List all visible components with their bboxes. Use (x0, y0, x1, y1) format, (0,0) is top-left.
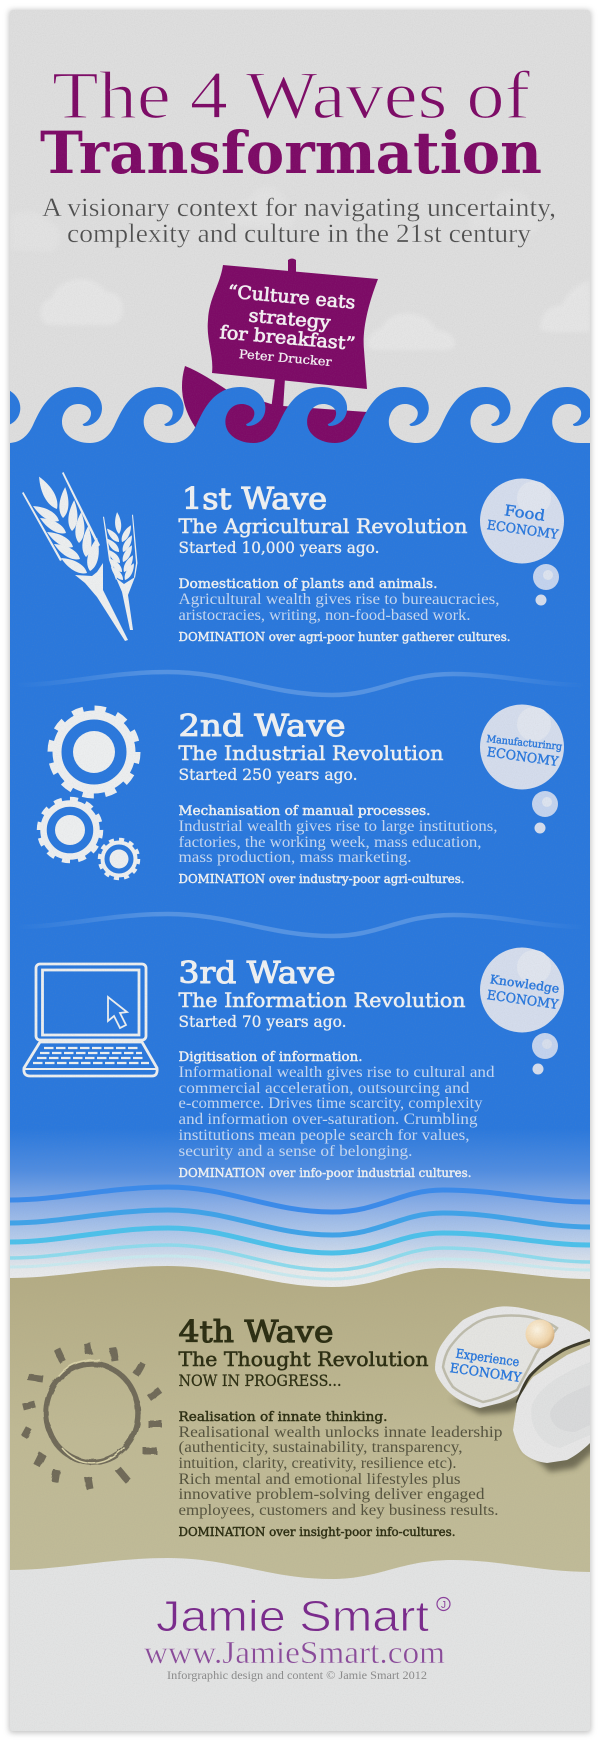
oyster shell: Experience economy: Experience (455, 1346, 520, 1369)
wave 1 text: The Agricultural Revolution (178, 514, 468, 538)
wave 4 text: Realisation of innate thinking. (178, 1410, 388, 1425)
laptop base (24, 1042, 157, 1076)
title: The 4 Waves of (52, 57, 530, 133)
wave 3 text: e-commerce. Drives time scarcity, complexity (178, 1095, 482, 1112)
wave 3 text: DOMINATION over info-poor industrial cultures. (178, 1166, 472, 1180)
subtitle: complexity and culture in the 21st century (67, 219, 531, 248)
wave 3 text: The Information Revolution (178, 988, 466, 1012)
sail quote: strategy (248, 305, 332, 334)
wave 1 thought bubble: Food economy: ECONOMY (486, 518, 560, 543)
wave 1 text: Agricultural wealth gives rise to bureaucracies, (178, 591, 500, 608)
pearl (526, 1320, 554, 1348)
wave 2 text: DOMINATION over industry-poor agri-cultures. (178, 872, 464, 886)
wave 4 text: Rich mental and emotional lifestyles plus (178, 1471, 460, 1488)
wave 1 text: Domestication of plants and animals. (178, 577, 438, 592)
upper shell (435, 1306, 590, 1408)
wave 2 text: The Industrial Revolution (178, 741, 444, 765)
wave 1 text (178, 482, 510, 644)
wave 3 text: Informational wealth gives rise to cultural and (178, 1064, 494, 1081)
footer paper (10, 1558, 590, 1600)
sun circle (46, 1364, 138, 1462)
wave 3 text: Digitisation of information. (178, 1050, 362, 1065)
keyboard (33, 1048, 149, 1063)
footer brand: Jamie Smart (156, 1592, 429, 1641)
wave 4 text: Realisational wealth unlocks innate leadership (178, 1424, 502, 1441)
small gear (100, 840, 138, 878)
clouds (10, 186, 590, 350)
wave 3 text: institutions mean people search for values, (178, 1127, 470, 1144)
wave 2 text: factories, the working week, mass education, (178, 834, 481, 851)
wave 2 text: mass production, mass marketing. (178, 849, 412, 866)
wave 2 text: Industrial wealth gives rise to large institutions, (178, 818, 498, 835)
wave 3 icon: laptop (24, 964, 157, 1076)
wave 3 text (178, 956, 494, 1180)
title: Transformation (40, 119, 542, 187)
large wheat ear (22, 472, 128, 641)
oyster shell: Experience economy (435, 1306, 595, 1472)
sun rays (23, 1343, 162, 1489)
wave 3 thought bubble: Knowledge economy: ECONOMY (486, 988, 560, 1013)
wave 1 thought bubble: Food economy (480, 478, 564, 606)
website url: www.JamieSmart.com (144, 1634, 445, 1670)
wave 1 text: 1st Wave (182, 482, 327, 517)
shoreline wave lines (10, 1187, 590, 1279)
sky background (10, 12, 590, 443)
wave 1 text: Started 10,000 years ago. (178, 538, 380, 557)
wave 2 thought bubble: Manufacturing economy (480, 704, 564, 834)
wave 3 text: 3rd Wave (178, 956, 336, 991)
lower shell (517, 1340, 590, 1403)
shell shadows (450, 1395, 595, 1472)
wave 4 icon: sun drawn in sand (23, 1343, 162, 1489)
wave 1 text: DOMINATION over agri-poor hunter gatherer cultures. (178, 630, 510, 644)
small wheat ear (103, 512, 138, 630)
oyster shell: Experience economy: ECONOMY (449, 1361, 523, 1386)
wave 3 text: Started 70 years ago. (178, 1012, 346, 1031)
subtitle: A visionary context for navigating uncertainty, (42, 193, 556, 222)
wave 4 text: DOMINATION over insight-poor info-cultures. (178, 1525, 456, 1539)
sail quote: for breakfast” (219, 322, 356, 355)
wave 2 thought bubble: Manufacturing economy: ECONOMY (486, 745, 560, 770)
wave 4 text: NOW IN PROGRESS... (178, 1371, 342, 1390)
wave 2 text: Started 250 years ago. (178, 765, 358, 784)
wave 2 text: Mechanisation of manual processes. (178, 804, 430, 819)
sail quote (219, 281, 356, 369)
boat (182, 258, 378, 445)
sail quote: “Culture eats (227, 281, 356, 314)
wave 3 text: commercial acceleration, outsourcing and (178, 1080, 470, 1097)
wave 2 thought bubble: Manufacturing economy: Manufacturinrg (486, 734, 563, 753)
wave 1 thought bubble: Food economy: Food (503, 501, 547, 525)
separator wave 1 (15, 672, 585, 695)
wave 1 text: aristocracies, writing, non-food-based work. (178, 607, 470, 624)
credit: Inforgraphic design and content © Jamie Smart 2012 (167, 1668, 427, 1682)
trademark J mark: J (441, 1600, 446, 1611)
wave 4 text: 4th Wave (178, 1315, 334, 1350)
wave 2 text (178, 709, 498, 886)
medium gear (39, 799, 101, 861)
wave 4 text: employees, customers and key business results. (178, 1502, 498, 1519)
wave 4 text (178, 1315, 502, 1539)
sail quote: Peter Drucker (238, 347, 333, 369)
wave 3 thought bubble: Knowledge economy (480, 948, 564, 1074)
wave 2 icon: gears (39, 708, 138, 878)
wave 2 text: 2nd Wave (178, 709, 346, 744)
sail (208, 265, 378, 389)
sand (10, 1266, 590, 1600)
large gear (50, 708, 138, 796)
subtitle (42, 193, 556, 248)
wave 4 text: intuition, clarity, creativity, resilience etc). (178, 1455, 456, 1472)
wave 3 text: security and a sense of belonging. (178, 1143, 412, 1160)
boat hull (182, 366, 367, 445)
wave 4 text: innovative problem-solving deliver engaged (178, 1486, 484, 1503)
wave 3 text: and information over-saturation. Crumbling (178, 1111, 478, 1128)
trademark J mark (437, 1598, 450, 1611)
curling waves (10, 387, 590, 443)
separator wave 2 (15, 914, 585, 936)
mouse cursor (108, 997, 127, 1028)
mast (271, 258, 296, 410)
wave 1 icon: wheat (22, 472, 138, 641)
title (40, 70, 541, 174)
laptop screen (36, 964, 146, 1040)
wave 4 text: The Thought Revolution (178, 1347, 429, 1371)
sea (10, 443, 590, 1292)
wave 3 thought bubble: Knowledge economy: Knowledge (489, 972, 560, 996)
wave 4 text: (authenticity, sustainability, transparency, (178, 1439, 462, 1456)
